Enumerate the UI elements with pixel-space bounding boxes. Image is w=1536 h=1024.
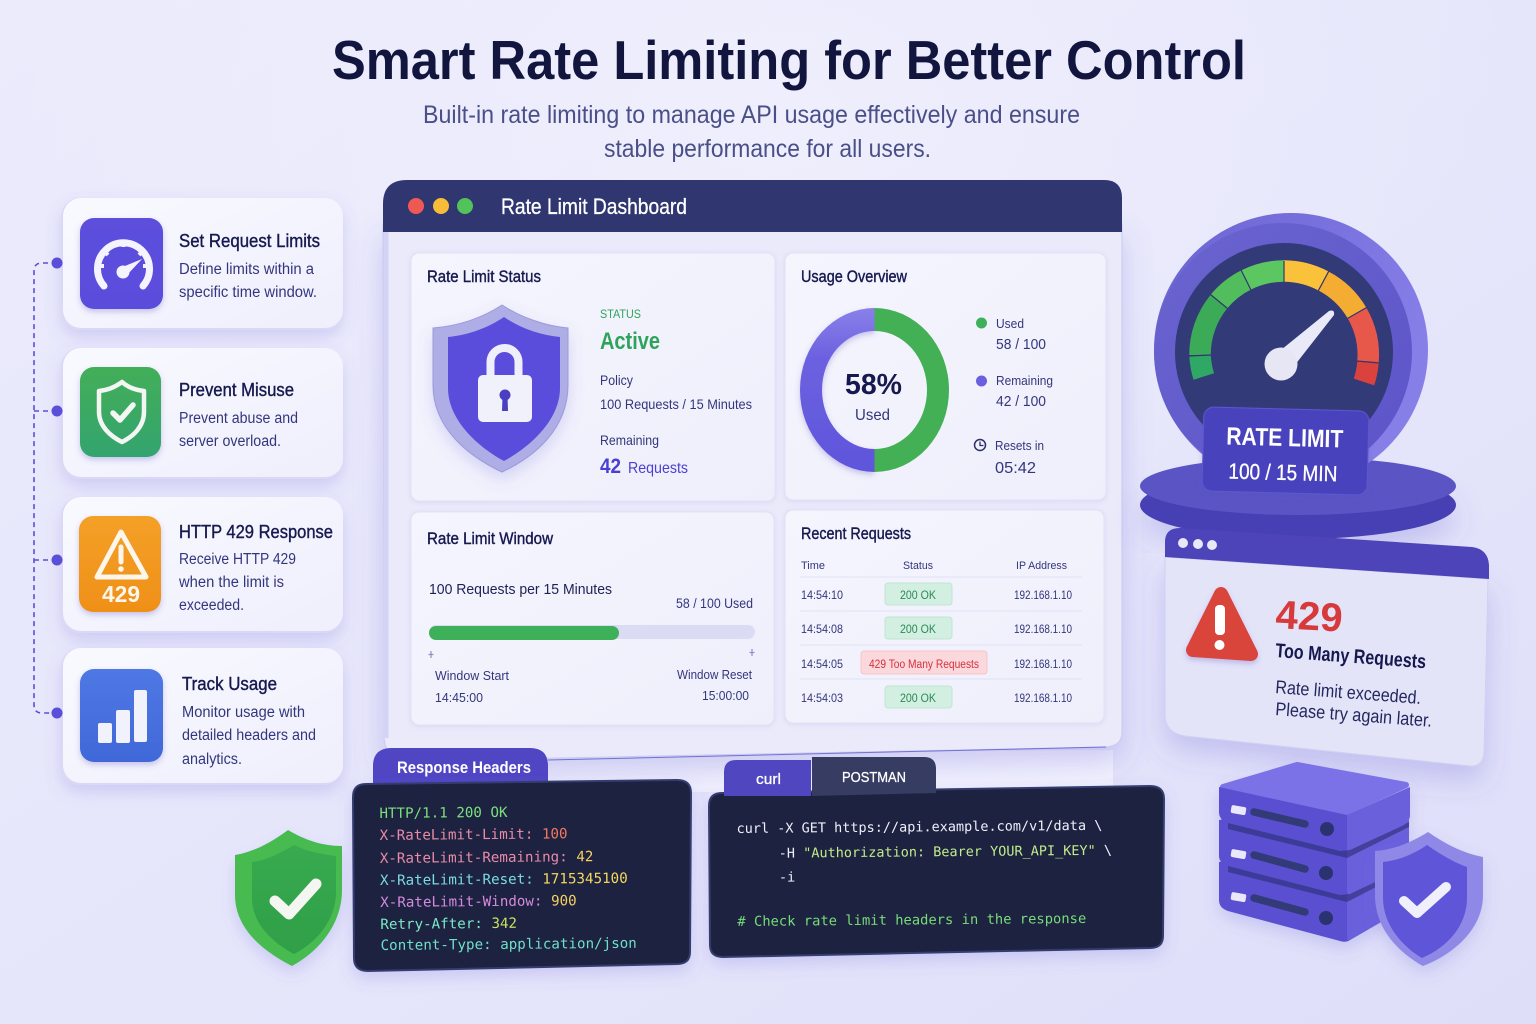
panel: rate limit window: 15:00:00 [702,688,749,703]
panel: rate limit window [411,512,774,725]
code: response headers [379,804,637,954]
panel: rate limit status: 100 Requests / 15 Minutes [600,396,752,412]
panel: rate limit window: Rate Limit Window [427,530,553,548]
rate limit plate [1202,407,1369,495]
needle [1264,310,1334,380]
panel: usage overview: Usage Overview [801,268,907,286]
code: curl command: -i [779,869,795,886]
panel: rate limit status: Requests [628,460,688,477]
legend: 05:42 [995,460,1036,477]
request row: 14:54:10 [801,588,843,602]
code: curl command: # Check rate limit headers in the response [737,911,1086,930]
server unit middle [1219,806,1409,902]
subtitle: Built-in rate limiting to manage API usage effectively and ensure [423,101,1080,129]
legend: 42 / 100 [996,394,1046,410]
panel: http 429 response: Receive HTTP 429 [179,551,296,568]
panel: rate limit window: Window Start [435,668,509,683]
request row: 429: 14:54:05 [801,657,843,671]
request row: 14:54:03 [801,691,843,705]
panel: recent requests [785,510,1104,723]
legend [974,316,1053,477]
gauge on pedestal [1140,213,1456,539]
legend: Used [996,316,1024,331]
request row [801,617,1072,639]
icon: bar chart [80,669,163,762]
tab: postman: POSTMAN [842,769,906,786]
code: response headers: Content-Type: application/json [381,936,637,954]
panel: rate limit status: Remaining [600,432,659,448]
panel: usage overview [785,253,1106,500]
icon: shield check [80,367,161,457]
panel: dashboard window [383,180,1122,761]
panel: 429 error window: Please try again later. [1275,698,1433,731]
rate limit plate: RATE LIMIT [1226,422,1344,454]
subtitle [423,101,1080,163]
window dots [1178,538,1217,550]
panel: http 429 response [61,497,343,633]
panel: 429 error window: Rate limit exceeded. [1275,676,1422,708]
icon: green shield check [235,830,342,966]
panel: 429 error window: 429 [1275,593,1344,640]
panel: track usage [61,648,343,785]
request row: 192.168.1.10 [1014,691,1072,705]
code: response headers: X-RateLimit-Reset: 1715345100 [380,871,628,889]
code: response headers: Retry-After: 342 [380,916,517,933]
panel: 429 error window [1165,528,1489,766]
panel: rate limit status: Active [600,328,660,355]
panel: prevent misuse: Prevent abuse and [179,410,298,427]
code: curl command [736,818,1113,930]
donut chart [800,308,949,472]
tab: curl: curl [756,771,781,788]
code: curl command: curl -X GET https://api.example.com/v1/data \ [736,818,1102,837]
panel: rate limit window: 58 / 100 Used [676,596,753,611]
panel: response headers [353,748,691,971]
request row: 192.168.1.10 [1014,588,1072,602]
request row: 200 OK [900,624,936,636]
request row: 429: 192.168.1.10 [1014,657,1072,671]
panel: curl example [709,757,1164,957]
panel: track usage: detailed headers and [182,727,316,744]
panel: recent requests: Recent Requests [801,525,911,543]
panel: track usage: Monitor usage with [182,704,305,721]
panel: rate limit status: STATUS [600,307,641,321]
panel: track usage: analytics. [182,751,242,768]
pedestal [1140,457,1456,539]
legend: 58 / 100 [996,337,1046,353]
panel: recent requests: Status [903,560,933,572]
request row [801,686,1072,708]
icon: red warning triangle [1193,594,1251,654]
request row: 200 OK [900,590,936,602]
panel: rate limit status: Rate Limit Status [427,268,541,286]
title: Smart Rate Limiting for Better Control [332,29,1246,91]
panel: rate limit window: 14:45:00 [435,690,483,705]
tab: response headers [373,748,548,790]
panel: recent requests: IP Address [1016,560,1067,572]
panel: track usage: Track Usage [182,673,277,694]
panel: prevent misuse: server overload. [179,433,281,450]
request row: 429 [801,651,1072,674]
tab: postman [812,757,936,796]
panel: set request limits [61,198,343,330]
request row: 429: 429 Too Many Requests [869,659,979,671]
code: response headers: HTTP/1.1 200 OK [379,805,508,822]
progress bar [428,625,755,658]
panel: rate limit status: 42 [600,455,621,478]
subtitle: stable performance for all users. [604,135,931,163]
panel: prevent misuse [61,348,343,479]
legend: Remaining [996,373,1053,388]
request row: 14:54:08 [801,622,843,636]
tab: response headers: Response Headers [397,758,531,777]
panel: set request limits: specific time window. [179,284,317,301]
panel: set request limits: Define limits within a [179,261,314,278]
server unit top [1219,765,1410,858]
gauge disc [1154,213,1428,487]
icon: warning 429 [79,516,161,612]
panel: http 429 response: HTTP 429 Response [179,521,333,542]
server unit bottom [1219,848,1409,942]
request row: 192.168.1.10 [1014,622,1072,636]
donut chart: 58% [845,369,902,401]
panel: http 429 response: exceeded. [179,597,244,614]
panel: 429 error window: Too Many Requests [1275,640,1427,673]
panel: rate limit window: Window Reset [677,667,752,682]
panel: recent requests: Time [801,560,825,572]
rate limit plate: 100 / 15 MIN [1228,459,1338,486]
panel: rate limit status [411,253,775,501]
icon: server stack [1219,765,1410,942]
icon: warning 429: 429 [102,581,140,607]
code: response headers: X-RateLimit-Window: 900 [380,893,577,911]
panel: rate limit window: 100 Requests per 15 Minutes [429,581,612,598]
icon: purple shield check [1375,832,1483,966]
dashboard header bar: Rate Limit Dashboard [501,194,687,219]
panel: http 429 response: when the limit is [178,574,284,591]
panel: prevent misuse: Prevent Misuse [179,379,294,400]
dashboard header bar [383,180,1122,232]
tab: curl [724,760,811,796]
code: response headers: X-RateLimit-Limit: 100 [380,826,568,844]
request row [801,583,1072,605]
panel: rate limit status: Policy [600,372,633,388]
dashed connector [34,258,62,718]
code: response headers: X-RateLimit-Remaining: 42 [380,849,593,867]
legend: Resets in [995,438,1044,453]
panel: set request limits: Set Request Limits [179,230,320,251]
icon: gauge [80,218,163,309]
icon: shield with lock [433,305,568,472]
request row: 200 OK [900,693,936,705]
code: curl command: -H "Authorization: Bearer YOUR_API_KEY" \ [779,843,1112,862]
donut chart: Used [855,407,890,424]
